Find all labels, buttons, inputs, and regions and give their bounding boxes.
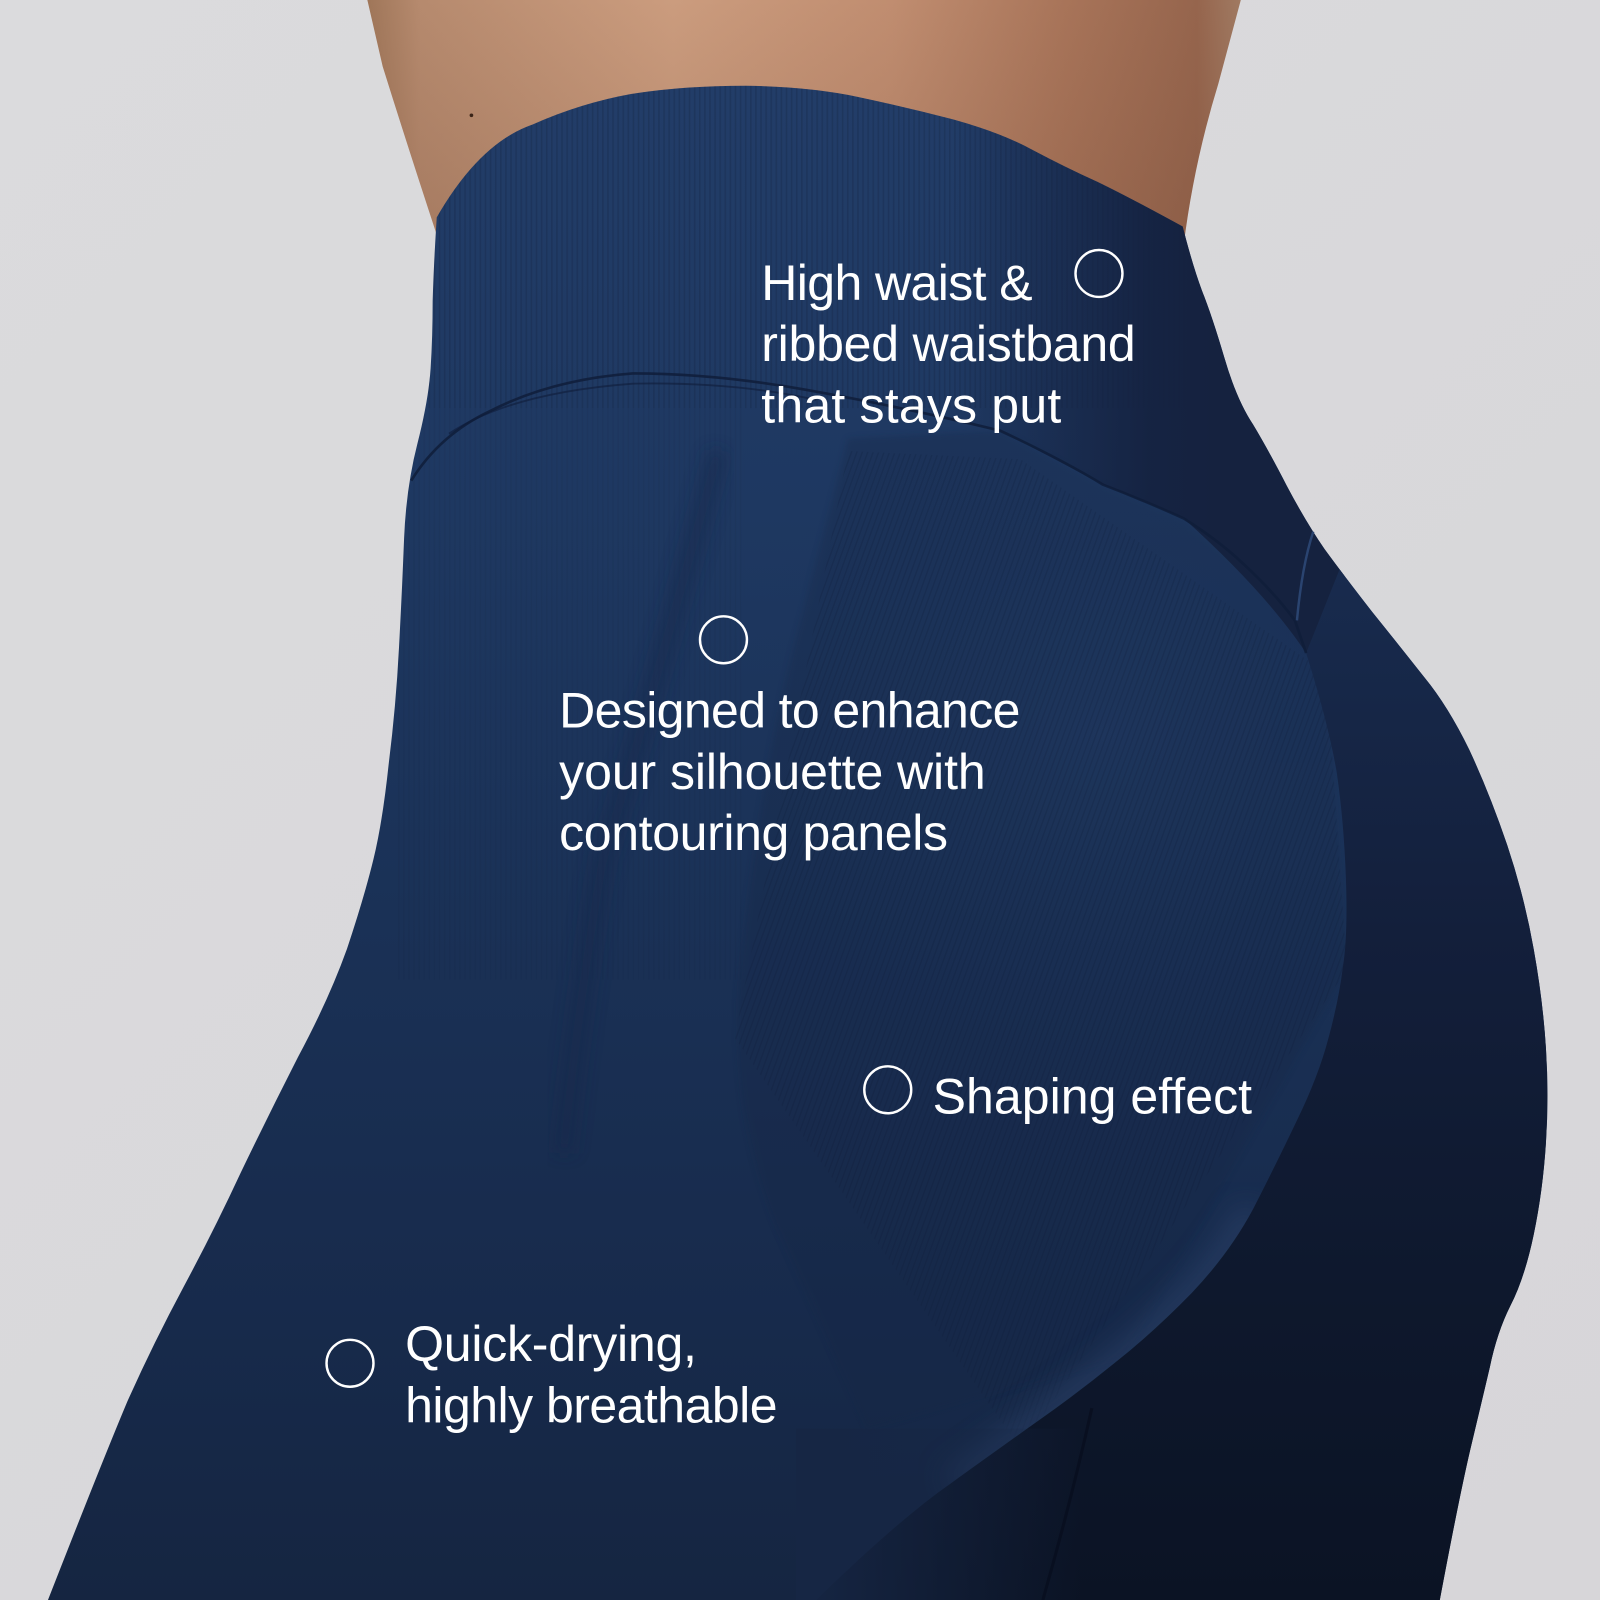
waistband seam [411, 373, 1306, 653]
label: your silhouette with [559, 744, 986, 800]
fabric shading and panels [428, 86, 1548, 1600]
label: Shaping effect [933, 1068, 1252, 1124]
label: High waist & [761, 255, 1033, 311]
label: highly breathable [405, 1377, 778, 1433]
crease rim highlight [965, 1214, 1249, 1472]
marker [327, 1340, 373, 1387]
torso skin [367, 0, 1241, 245]
waistband right shadow [993, 134, 1344, 651]
side panel seam [1297, 532, 1313, 620]
callout: high waist [761, 250, 1136, 433]
inner thigh seam [1043, 1408, 1092, 1600]
marker [864, 1066, 911, 1113]
label: that stays put [761, 377, 1061, 433]
marker [700, 616, 747, 663]
label: ribbed waistband [761, 316, 1136, 372]
callout: shaping effect [864, 1066, 1252, 1124]
waistband stitch line [449, 383, 816, 434]
callout: quick-drying [327, 1316, 778, 1433]
dark thigh shadow [872, 569, 1548, 1600]
callout: contouring panels [559, 616, 1020, 861]
marker [1076, 250, 1122, 297]
label: Designed to enhance [559, 683, 1020, 739]
label: contouring panels [559, 805, 948, 861]
label: Quick-drying, [405, 1316, 697, 1372]
